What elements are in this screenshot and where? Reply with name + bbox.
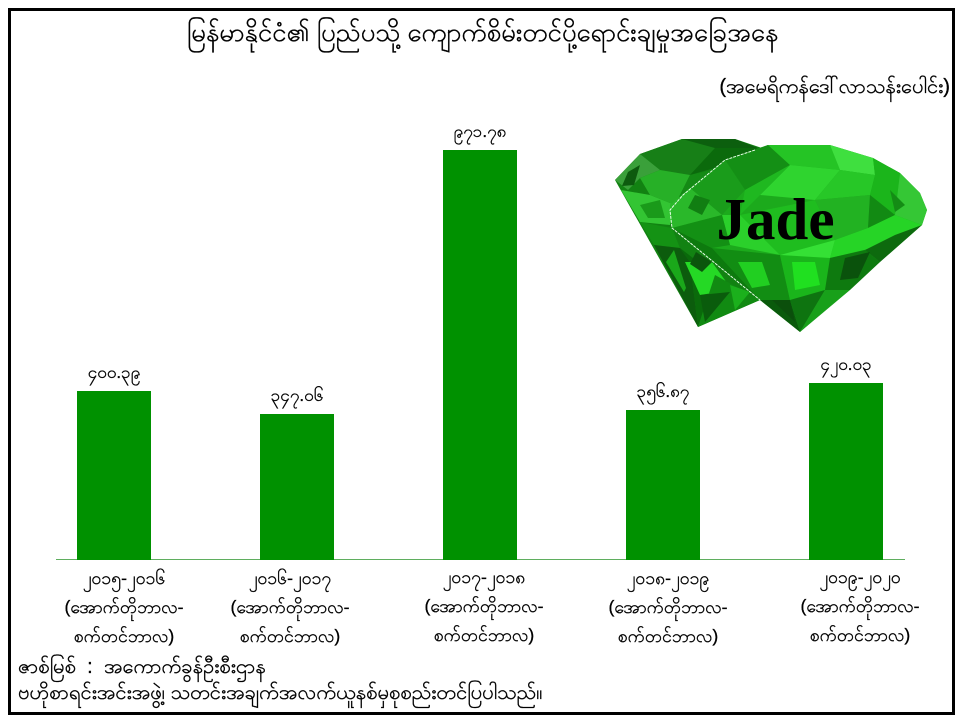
category 2017-2018: (အောက်တိုဘာလ- — [424, 596, 543, 616]
category 2015-2016 — [64, 568, 183, 646]
axis line — [56, 559, 905, 560]
category 2017-2018 — [424, 567, 543, 645]
category 2019-2020: (အောက်တိုဘာလ- — [800, 596, 919, 616]
category 2015-2016: (အောက်တိုဘာလ- — [64, 597, 183, 617]
source note — [18, 654, 542, 708]
value 2016-2017: ၃၄၇.၀၆ — [271, 386, 323, 405]
category 2016-2017: စက်တင်ဘာလ) — [240, 626, 340, 646]
category 2019-2020: ၂၀၁၉-၂၀၂၀ — [819, 567, 901, 587]
bar 2017-2018 — [443, 150, 517, 560]
category 2019-2020: စက်တင်ဘာလ) — [810, 625, 910, 645]
white seam — [670, 150, 760, 300]
category 2017-2018: ၂၀၁၇-၂၀၁၈ — [443, 567, 525, 587]
front gem — [670, 145, 927, 332]
title: မြန်မာနိုင်ငံ၏ ပြည်ပသို့ ကျောက်စိမ်းတင်ပို့ရောင်းချမှုအခြေအနေ — [187, 19, 778, 47]
back gem — [615, 139, 768, 327]
gem label: Jade — [716, 186, 834, 252]
bar 2016-2017 — [260, 414, 334, 560]
bar 2015-2016 — [77, 391, 151, 560]
category 2016-2017: (အောက်တိုဘာလ- — [230, 597, 349, 617]
category 2018-2019: (အောက်တိုဘာလ- — [608, 597, 727, 617]
value 2019-2020: ၄၂၀.၀၃ — [820, 355, 872, 374]
category 2015-2016: စက်တင်ဘာလ) — [74, 626, 174, 646]
unit label: (အမေရိကန်ဒေါ်လာသန်းပေါင်း) — [719, 76, 950, 98]
category 2018-2019: စက်တင်ဘာလ) — [618, 626, 718, 646]
value 2017-2018: ၉၇၁.၇၈ — [454, 122, 506, 141]
category 2015-2016: ၂၀၁၅-၂၀၁၆ — [83, 568, 165, 588]
value 2015-2016: ၄၀၀.၃၉ — [88, 363, 140, 382]
category 2018-2019 — [608, 568, 727, 646]
category 2018-2019: ၂၀၁၈-၂၀၁၉ — [627, 568, 709, 588]
source note: ဇာစ်မြစ် : အကောက်ခွန်ဦးစီးဌာန — [18, 656, 266, 678]
bar 2018-2019 — [626, 410, 700, 560]
category 2016-2017: ၂၀၁၆-၂၀၁၇ — [249, 568, 331, 588]
bar 2019-2020 — [809, 383, 883, 560]
category 2019-2020 — [800, 567, 919, 645]
bar chart — [56, 122, 919, 646]
source note: ဗဟိုစာရင်းအင်းအဖွဲ့၊ သတင်းအချက်အလက်ယူနစ်မှစုစည်းတင်ပြပါသည်။ — [18, 682, 542, 704]
value 2018-2019: ၃၅၆.၈၇ — [637, 382, 689, 401]
category 2017-2018: စက်တင်ဘာလ) — [434, 625, 534, 645]
category 2016-2017 — [230, 568, 349, 646]
